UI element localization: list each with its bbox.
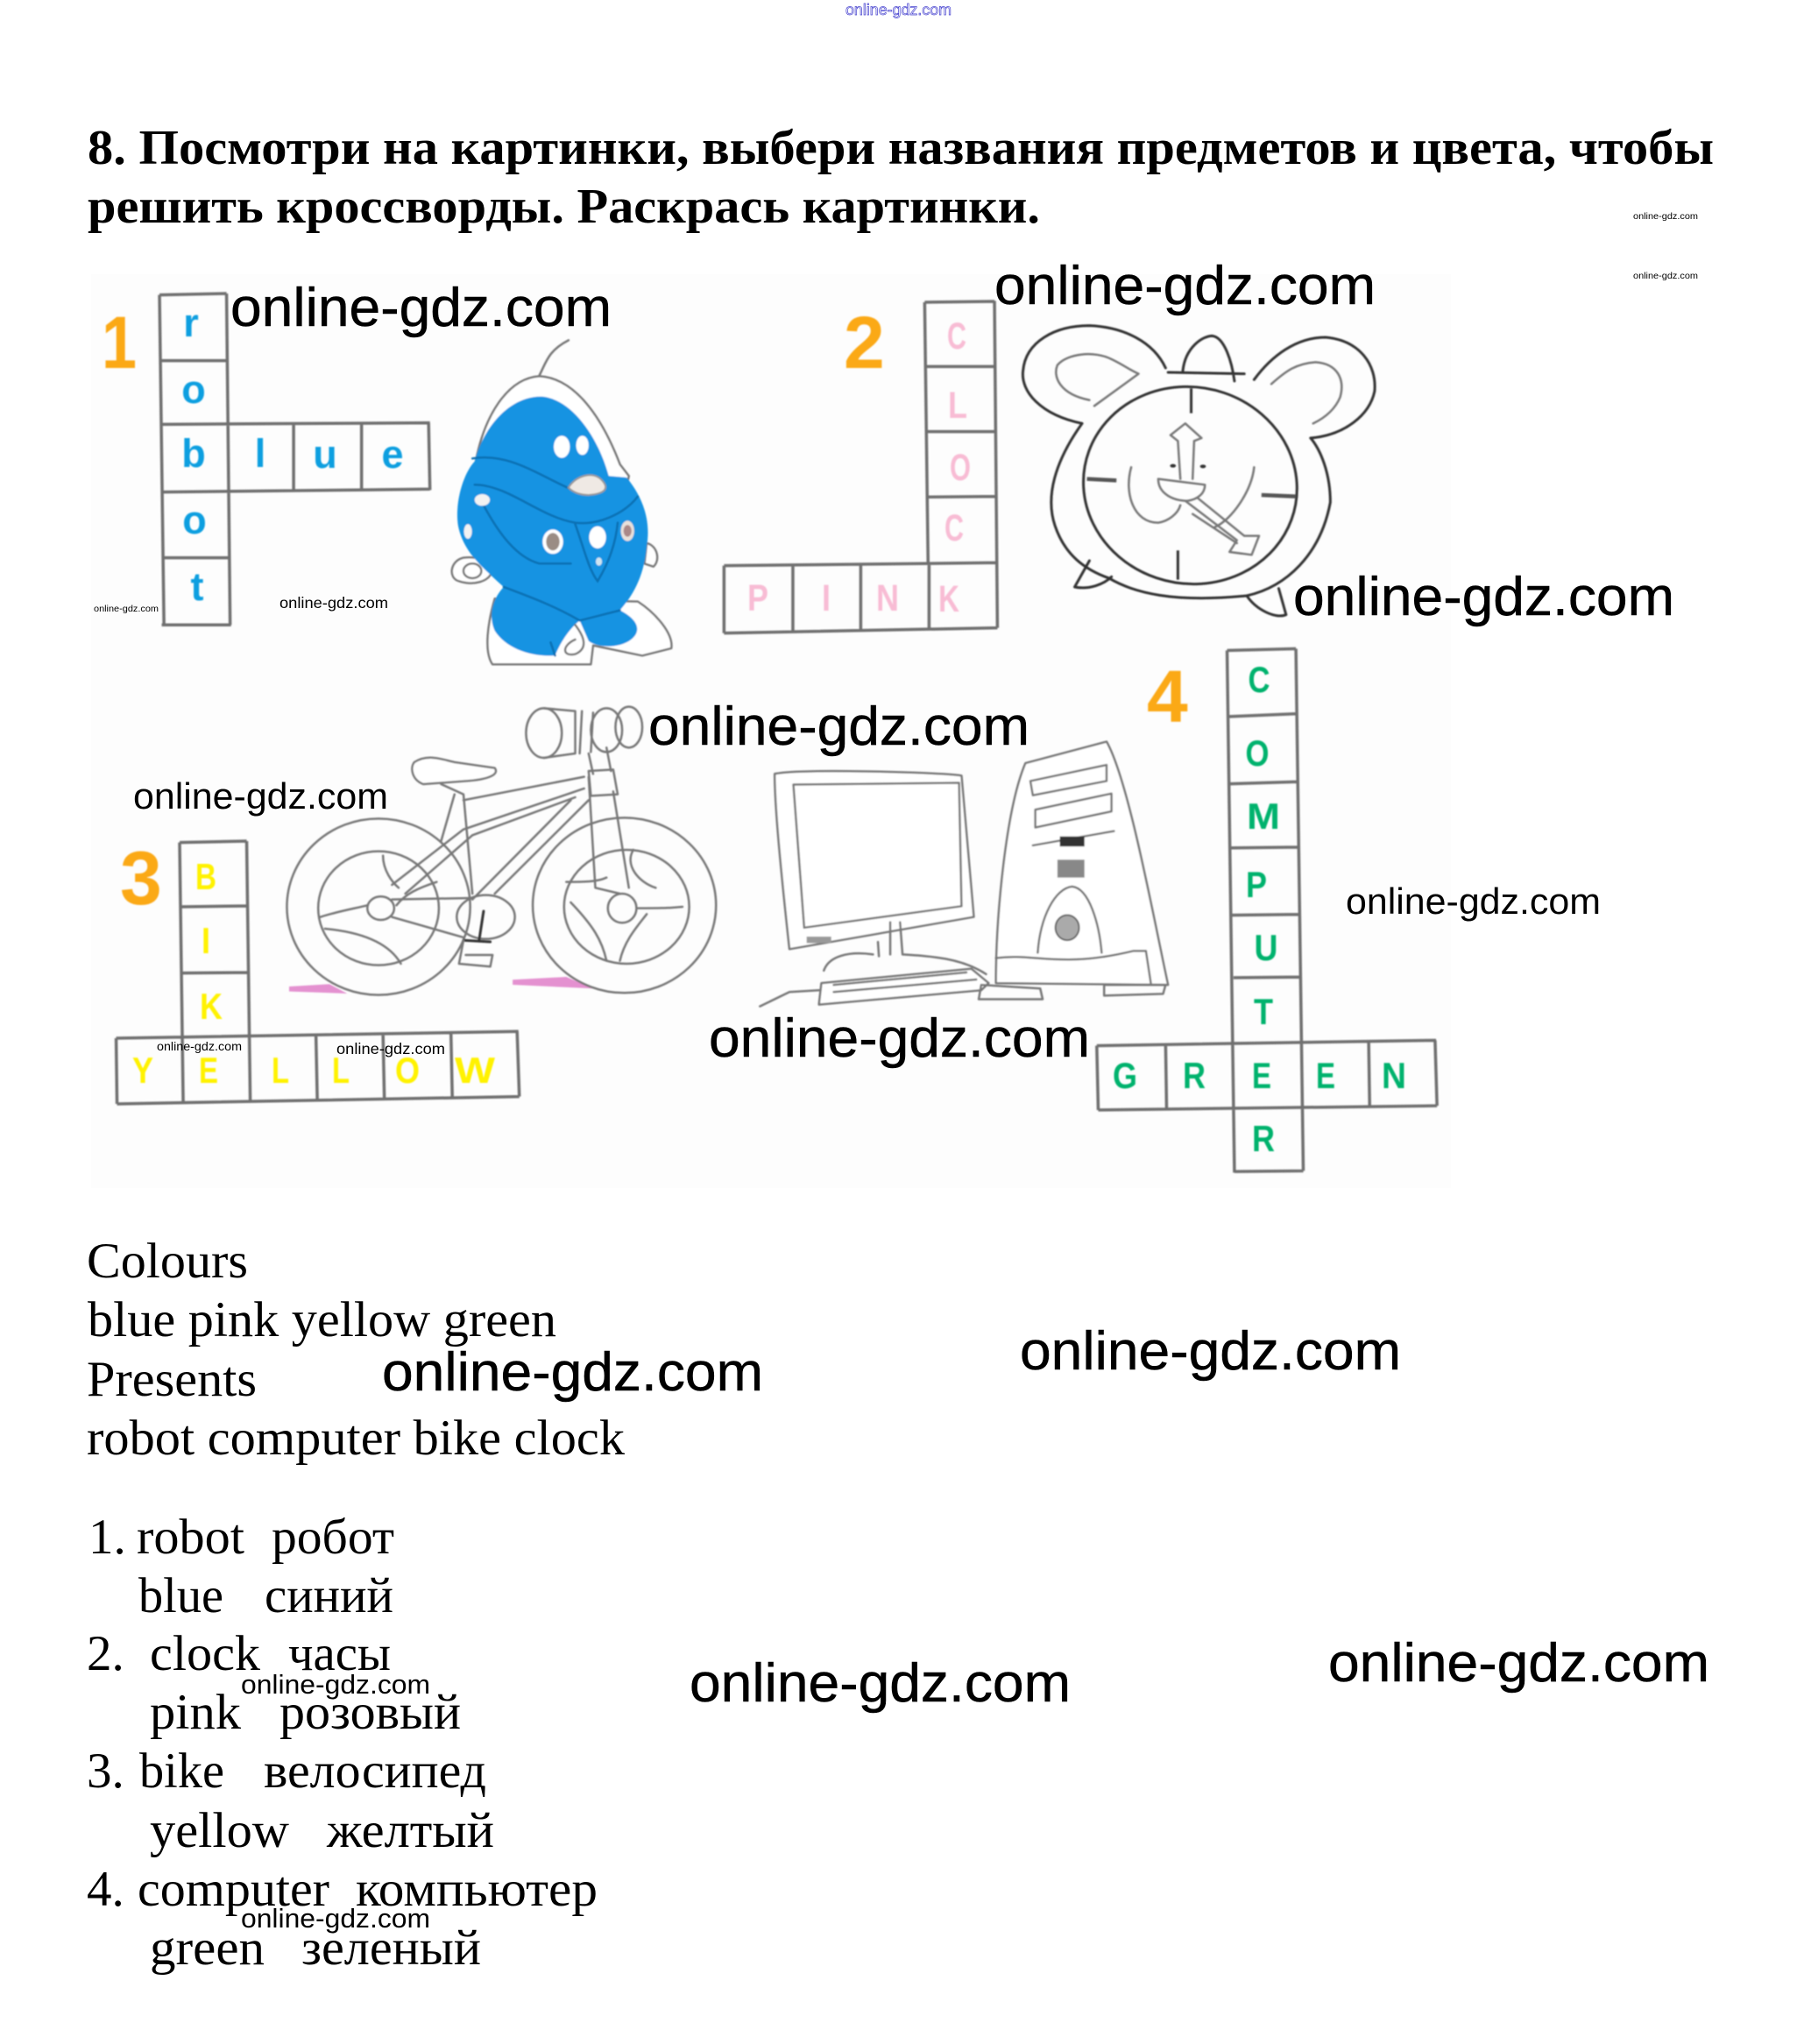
crossword 3 letters: bike, yellow — [132, 856, 495, 1091]
crossword 2 letters: clock, pink: C — [944, 507, 964, 549]
crossword letters — [102, 301, 1406, 1159]
answers list: велосипед — [264, 1743, 486, 1799]
watermarks: online-gdz.com — [133, 776, 388, 817]
crossword 4 grid — [1097, 648, 1437, 1172]
icon: computer — [760, 742, 1168, 1007]
answers list: yellow — [150, 1803, 289, 1858]
title: решить кроссворды. Раскрась картинки. — [88, 180, 1040, 234]
watermarks: online-gdz.com — [157, 1040, 242, 1053]
answers list: зеленый — [301, 1920, 481, 1976]
crossword 3 letters: bike, yellow: B — [195, 856, 216, 897]
crossword 1 grid — [159, 294, 430, 625]
watermarks: online-gdz.com — [230, 278, 612, 338]
crossword 1 number: 1 — [102, 301, 137, 384]
crossword 3 grid — [117, 841, 520, 1104]
crossword 1 letters: robot, blue: b — [181, 431, 206, 476]
crossword 3 number: 3 — [120, 837, 162, 921]
crossword 2 letters: clock, pink: P — [747, 577, 768, 619]
crossword 1 letters: robot, blue: o — [182, 498, 207, 542]
icon: robot — [452, 340, 671, 664]
crossword 3 letters: bike, yellow: K — [200, 986, 223, 1027]
answers list: розовый — [279, 1685, 461, 1740]
answers list: computer — [138, 1862, 329, 1917]
crossword 4 letters: computer, green: N — [1382, 1055, 1406, 1096]
word lists: Colours — [87, 1234, 248, 1289]
answers list: green — [150, 1920, 265, 1976]
crossword 2 letters: clock, pink: O — [950, 447, 971, 489]
watermarks: online-gdz.com — [94, 604, 159, 614]
answers list: часы — [288, 1626, 391, 1681]
watermarks: online-gdz.com — [1020, 1321, 1401, 1382]
answers list: clock — [150, 1626, 261, 1681]
crossword 4 letters: computer, green: C — [1248, 659, 1270, 700]
watermarks: online-gdz.com — [1633, 271, 1698, 281]
watermarks: online-gdz.com — [279, 594, 388, 612]
crossword 2 number: 2 — [844, 301, 885, 384]
watermarks: online-gdz.com — [241, 1669, 430, 1700]
crossword 4 letters: computer, green: U — [1255, 927, 1277, 968]
answers list: робот — [272, 1510, 394, 1565]
watermarks: online-gdz.com — [648, 697, 1029, 757]
watermarks: online-gdz.com — [709, 1008, 1090, 1069]
crossword 3 letters: bike, yellow: O — [395, 1050, 420, 1091]
watermarks: online-gdz.com — [1328, 1633, 1709, 1694]
crossword 2 letters: clock, pink: L — [948, 385, 967, 427]
watermarks — [94, 211, 1709, 1934]
crossword 4 letters: computer, green: O — [1246, 732, 1269, 774]
crossword 2 letters: clock, pink: I — [822, 577, 831, 619]
answers list: компьютер — [356, 1862, 598, 1917]
crossword 1 letters: robot, blue — [181, 301, 404, 609]
crossword 4 letters: computer, green — [1113, 659, 1406, 1159]
watermarks: online-gdz.com — [1293, 567, 1674, 627]
answers list: 2. — [87, 1626, 124, 1681]
crossword 4 letters: computer, green: P — [1246, 864, 1267, 905]
answers list: 3. — [87, 1743, 124, 1799]
word lists: Presents — [87, 1352, 257, 1407]
crossword 4 letters: computer, green: T — [1254, 991, 1273, 1032]
word lists: robot computer bike clock — [87, 1411, 625, 1466]
crossword 1 letters: robot, blue: r — [183, 301, 199, 345]
crossword 3 letters: bike, yellow: I — [202, 920, 210, 961]
crossword 1 letters: robot, blue: t — [191, 564, 203, 609]
watermarks: online-gdz.com — [382, 1342, 763, 1403]
watermarks: online-gdz.com — [1346, 881, 1601, 922]
answers list — [87, 1510, 598, 1976]
crossword 2 letters: clock, pink — [747, 315, 971, 620]
watermarks: online-gdz.com — [690, 1653, 1071, 1714]
crossword 4 letters: computer, green: M — [1247, 796, 1280, 837]
watermarks: online-gdz.com — [1633, 211, 1698, 222]
crossword 1 letters: robot, blue: l — [255, 431, 265, 476]
crossword 3 letters: bike, yellow: W — [455, 1050, 495, 1091]
answers list: robot — [137, 1510, 244, 1565]
word lists: blue pink yellow green — [88, 1292, 556, 1347]
answers list: 4. — [87, 1862, 124, 1917]
icon: alarm clock — [1022, 326, 1375, 616]
crossword 1 letters: robot, blue: u — [313, 432, 337, 477]
watermarks: online-gdz.com — [994, 256, 1376, 316]
crossword 2 letters: clock, pink: C — [947, 315, 966, 357]
answers list: bike — [139, 1743, 224, 1799]
crossword 2 letters: clock, pink: N — [876, 577, 899, 619]
word lists — [87, 1234, 625, 1466]
crossword 3 letters: bike, yellow: Y — [132, 1050, 153, 1091]
crossword 4 letters: computer, green: R — [1252, 1118, 1275, 1159]
answers list: желтый — [326, 1803, 494, 1858]
answers list: pink — [150, 1685, 242, 1740]
crossword 3 letters: bike, yellow: E — [199, 1050, 218, 1091]
title: 8. Посмотри на картинки, выбери названия предметов и цвета, чтобы — [88, 121, 1714, 175]
crossword 4 letters: computer, green: E — [1252, 1055, 1271, 1096]
icon: bicycle — [287, 707, 716, 995]
crossword 2 grid — [724, 301, 997, 633]
top watermark: online-gdz.com — [845, 1, 952, 18]
answers list: синий — [265, 1568, 393, 1623]
title — [88, 121, 1714, 234]
crossword 1 letters: robot, blue: e — [381, 432, 404, 477]
crossword 4 letters: computer, green: R — [1183, 1055, 1206, 1096]
crossword 4 number: 4 — [1147, 655, 1188, 738]
answers list: 1. — [88, 1510, 126, 1565]
crossword 4 letters: computer, green: E — [1316, 1055, 1335, 1096]
panel: crossword picture — [91, 274, 1451, 1188]
crossword 3 letters: bike, yellow: L — [332, 1050, 350, 1091]
crossword 3 letters: bike, yellow: L — [272, 1050, 289, 1091]
crossword 1 letters: robot, blue: o — [181, 367, 206, 412]
answers list: blue — [138, 1568, 223, 1623]
watermarks: online-gdz.com — [241, 1903, 430, 1934]
crossword 4 letters: computer, green: G — [1113, 1055, 1137, 1096]
crossword 2 letters: clock, pink: K — [938, 578, 959, 620]
watermarks: online-gdz.com — [336, 1040, 445, 1057]
